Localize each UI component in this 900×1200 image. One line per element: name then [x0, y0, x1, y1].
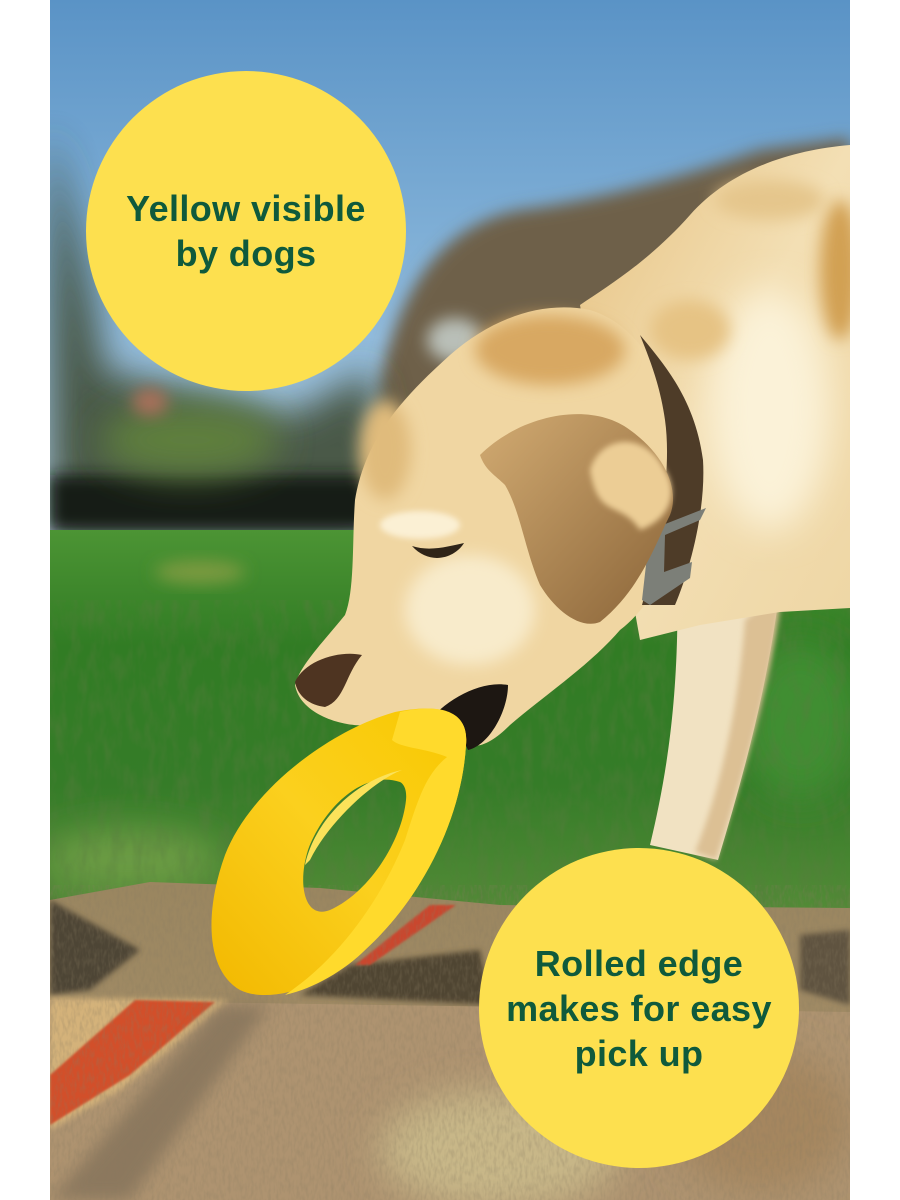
- blanket: [50, 882, 850, 1012]
- dog: collar: [640, 335, 703, 605]
- callout: yellow visible by dogs: Yellow visible: [126, 188, 366, 229]
- callout: rolled edge makes for easy pick up: Rolled edge: [535, 942, 743, 984]
- dog: head: [295, 307, 682, 746]
- grass: [50, 530, 850, 920]
- callout: rolled edge makes for easy pick up: pick up: [575, 1032, 703, 1074]
- toy: yellow ring: [211, 708, 466, 995]
- dog: leg: [650, 612, 776, 860]
- callout: rolled edge makes for easy pick up: makes for easy: [506, 988, 772, 1028]
- trees: [50, 130, 400, 535]
- dog: nose and mouth: [295, 654, 362, 707]
- dog: body: [580, 145, 850, 640]
- callout: yellow visible by dogs: by dogs: [176, 233, 316, 274]
- callout: rolled edge makes for easy pick up: [479, 848, 799, 1168]
- callout: yellow visible by dogs: [86, 71, 406, 391]
- distant house: [369, 128, 850, 416]
- dog: eye: [412, 543, 464, 558]
- dog: ear: [480, 414, 673, 624]
